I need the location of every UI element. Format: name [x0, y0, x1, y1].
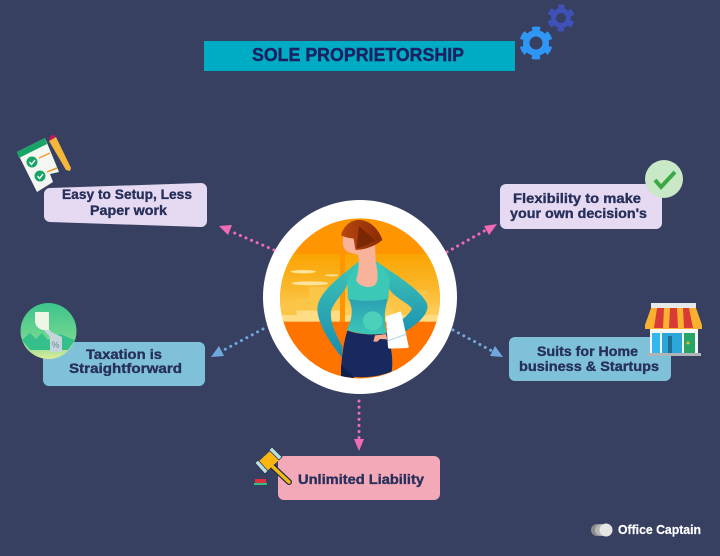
- card: easy to setup: Easy to Setup, Less: [62, 186, 192, 202]
- card: flexibility: Flexibility to make: [513, 190, 641, 206]
- arrow: to unlimited liability: [354, 401, 364, 451]
- arrow: to easy setup: [219, 225, 274, 250]
- icon: small indigo gear: [547, 4, 575, 32]
- hand: [373, 334, 387, 342]
- icon: large blue gear: [519, 26, 553, 60]
- icon: receipt in green circle: [20, 303, 76, 359]
- icon: checklist and pencil: [17, 135, 71, 192]
- right arm: [377, 262, 428, 341]
- central portrait circle: [263, 200, 457, 394]
- card: taxation: Straightforward: [69, 360, 182, 376]
- card: easy to setup: Paper work: [90, 202, 167, 218]
- card: home business: [509, 303, 702, 381]
- card: taxation: [20, 303, 205, 386]
- skirt: [341, 331, 392, 377]
- card: flexibility: [500, 160, 683, 229]
- left arm: [317, 262, 358, 357]
- neck and face: [343, 233, 378, 287]
- logo: office captain: Office Captain: [618, 523, 701, 537]
- arrow: to flexibility: [447, 224, 497, 252]
- card: flexibility: your own decision's: [510, 205, 647, 221]
- icon: gavel: [254, 447, 289, 485]
- card: easy to setup: [17, 135, 201, 221]
- hair: [341, 220, 382, 250]
- icon: shop: [645, 303, 702, 356]
- card: home business: Suits for Home: [537, 343, 638, 359]
- icon: check badge: [645, 160, 683, 198]
- card: unlimited liability: Unlimited Liability: [298, 471, 424, 487]
- card: taxation: Taxation is: [86, 346, 162, 362]
- title banner: SOLE PROPRIETORSHIP: [252, 45, 464, 65]
- paper: [387, 313, 407, 347]
- card: unlimited liability: [254, 447, 440, 500]
- arrow: to taxation: [211, 329, 263, 357]
- title banner: [204, 41, 515, 71]
- arrow: to home business: [453, 330, 503, 357]
- torso: [347, 297, 389, 334]
- icon: receipt in green circle: %: [51, 340, 60, 350]
- card: home business: business & Startups: [519, 358, 659, 374]
